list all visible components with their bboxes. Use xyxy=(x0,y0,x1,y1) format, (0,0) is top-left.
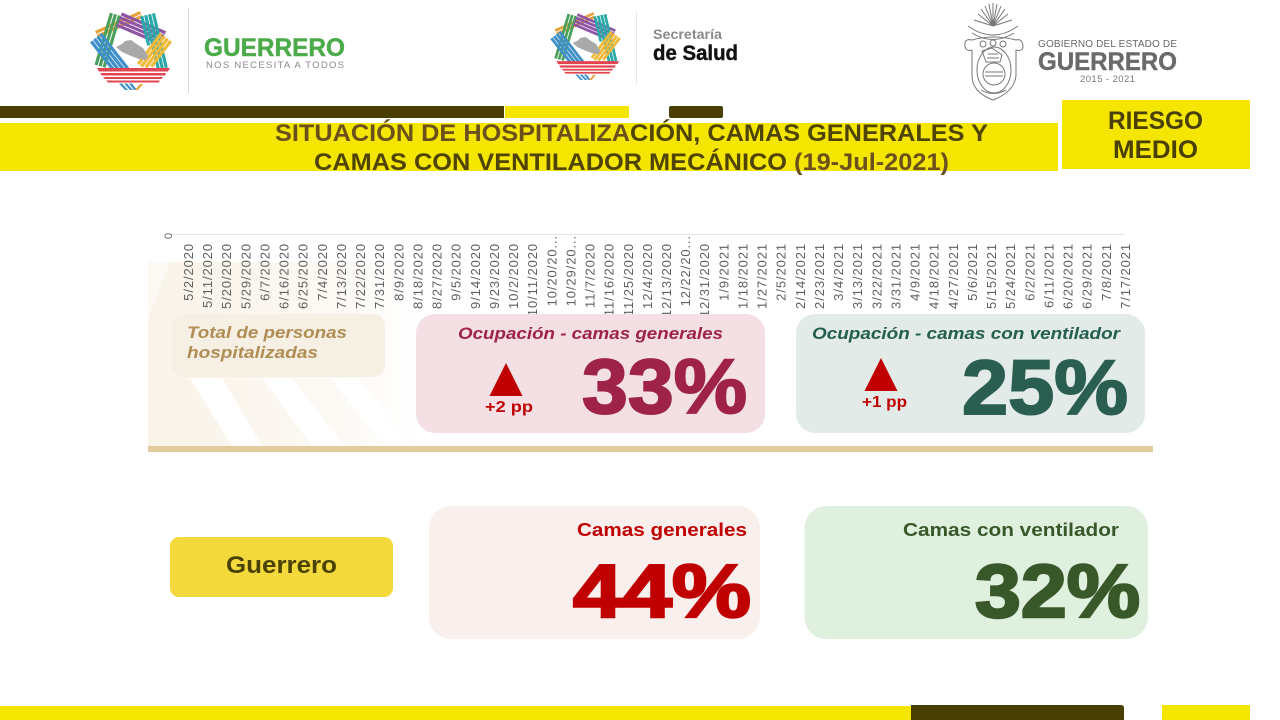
change label: +2 pp xyxy=(485,399,533,416)
date labels: 11/16/2020 xyxy=(602,243,617,316)
date labels: 5/6/2021 xyxy=(965,243,980,301)
percentage: 25% xyxy=(962,345,1128,431)
logo wordmark: GUERRERO xyxy=(204,34,345,62)
logo: Gobierno del Estado de Guerrero xyxy=(965,3,1177,100)
icon: woven heptagon emblem xyxy=(90,11,172,90)
divider band xyxy=(148,446,1153,452)
percentage: 44% xyxy=(573,549,751,633)
date labels: 6/16/2020 xyxy=(277,243,292,309)
percentage: 33% xyxy=(582,344,747,430)
date labels: 7/4/2020 xyxy=(315,243,330,301)
panel: ventilator beds occupancy xyxy=(796,314,1145,433)
icon: coat of arms xyxy=(965,3,1023,100)
date labels: 9/23/2020 xyxy=(487,243,502,309)
date labels: 10/11/2020 xyxy=(525,243,540,316)
date labels: 7/22/2020 xyxy=(353,243,368,309)
title line 2: CAMAS CON VENTILADOR MECÁNICO (19-Jul-2021) xyxy=(314,148,949,176)
date labels: 11/25/2020 xyxy=(621,243,636,316)
date labels: 9/5/2020 xyxy=(449,243,464,301)
date labels: 2/5/2021 xyxy=(774,243,789,301)
date labels: 5/2/2020 xyxy=(181,243,196,301)
date labels: 6/25/2020 xyxy=(296,243,311,309)
watermark pattern xyxy=(148,262,418,446)
panel: Guerrero label xyxy=(170,537,393,597)
date labels: 5/24/2021 xyxy=(1003,243,1018,309)
secretaria text: Secretaría xyxy=(653,27,723,42)
Guerrero wordmark: GUERRERO xyxy=(1038,48,1177,76)
government line: GOBIERNO DEL ESTADO DE xyxy=(1038,39,1177,50)
date labels: 2/23/2021 xyxy=(812,243,827,309)
date labels: 3/31/2021 xyxy=(888,243,903,309)
total label: Total de personas xyxy=(187,323,347,342)
title line 1: SITUACIÓN DE HOSPITALIZA CIÓN, CAMAS GENERALES Y xyxy=(275,119,988,147)
risk text xyxy=(1108,107,1203,164)
logo: Secretaría de Salud xyxy=(550,12,738,84)
date labels: 8/27/2020 xyxy=(430,243,445,309)
date labels: 1/27/2021 xyxy=(755,243,770,309)
date labels: 8/9/2020 xyxy=(391,243,406,301)
years: 2015 - 2021 xyxy=(1080,74,1135,85)
heading: Camas generales xyxy=(577,520,747,540)
date labels: 1/9/2021 xyxy=(716,243,731,301)
date labels: 5/11/2020 xyxy=(200,243,215,308)
date labels: 8/18/2020 xyxy=(410,243,425,309)
date labels: 1/18/2021 xyxy=(736,243,750,309)
Guerrero text: Guerrero xyxy=(226,552,337,579)
title xyxy=(275,119,988,176)
date labels: 7/17/2021 xyxy=(1118,243,1133,309)
logo slogan: NOS NECESITA A TODOS xyxy=(206,60,344,71)
date labels: 3/4/2021 xyxy=(831,243,846,301)
change label: +1 pp xyxy=(862,394,907,411)
date labels: 6/11/2021 xyxy=(1041,243,1056,308)
total label: hospitalizadas xyxy=(187,343,318,362)
date labels: 5/20/2020 xyxy=(219,243,234,309)
date labels: 6/7/2020 xyxy=(258,243,272,301)
title banner xyxy=(0,123,1058,171)
date labels: 5/15/2021 xyxy=(984,243,999,309)
date labels: 7/13/2020 xyxy=(334,243,349,309)
panel: ventilator beds xyxy=(804,506,1148,639)
heading: Camas con ventilador xyxy=(903,520,1119,540)
date labels: 12/4/2020 xyxy=(640,243,655,309)
heading: Ocupación - camas con ventilador xyxy=(812,324,1122,343)
risk badge xyxy=(1062,100,1250,169)
date labels: 12/13/2020 xyxy=(659,243,674,317)
percentage: 32% xyxy=(975,549,1140,633)
date labels: 12/31/2020 xyxy=(697,243,712,317)
date labels: 10/20/20... xyxy=(544,235,559,306)
chart: date axis xyxy=(163,233,1133,317)
icon: woven heptagon emblem small xyxy=(550,12,621,80)
panel: total hospitalized xyxy=(172,314,385,377)
date labels: 7/8/2021 xyxy=(1099,243,1114,301)
date labels: 11/7/2020 xyxy=(582,243,598,308)
heading: Ocupación - camas generales xyxy=(458,324,723,343)
icon: up arrow xyxy=(864,358,898,391)
icon: up arrow xyxy=(490,363,522,396)
risk text: MEDIO xyxy=(1113,136,1198,164)
total label xyxy=(187,323,347,362)
date labels: 4/18/2021 xyxy=(927,243,942,309)
date labels: 5/29/2020 xyxy=(238,243,253,309)
date labels: 4/9/2021 xyxy=(908,243,923,301)
date labels: 3/22/2021 xyxy=(869,243,884,309)
date labels: 10/29/20... xyxy=(563,235,578,306)
header bars xyxy=(0,106,723,118)
date labels: 6/29/2021 xyxy=(1080,243,1095,309)
logo: Guerrero nos necesita a todos xyxy=(90,8,345,93)
axis zero: 0 xyxy=(163,233,175,239)
date labels: 7/31/2020 xyxy=(372,243,387,309)
date labels: 2/14/2021 xyxy=(793,243,808,309)
date labels xyxy=(181,235,1133,317)
date labels: 10/2/2020 xyxy=(506,243,521,309)
panel: general beds occupancy xyxy=(416,314,765,433)
de Salud text: de Salud xyxy=(653,42,738,65)
date labels: 4/27/2021 xyxy=(946,243,961,309)
date labels: 3/13/2021 xyxy=(850,243,865,309)
risk text: RIESGO xyxy=(1108,107,1203,135)
date labels: 6/2/2021 xyxy=(1022,243,1037,301)
footer bars xyxy=(0,705,1250,720)
date labels: 6/20/2021 xyxy=(1060,243,1076,309)
date labels: 12/22/20... xyxy=(678,235,693,306)
date labels: 9/14/2020 xyxy=(468,243,483,309)
panel: general beds xyxy=(429,506,760,639)
